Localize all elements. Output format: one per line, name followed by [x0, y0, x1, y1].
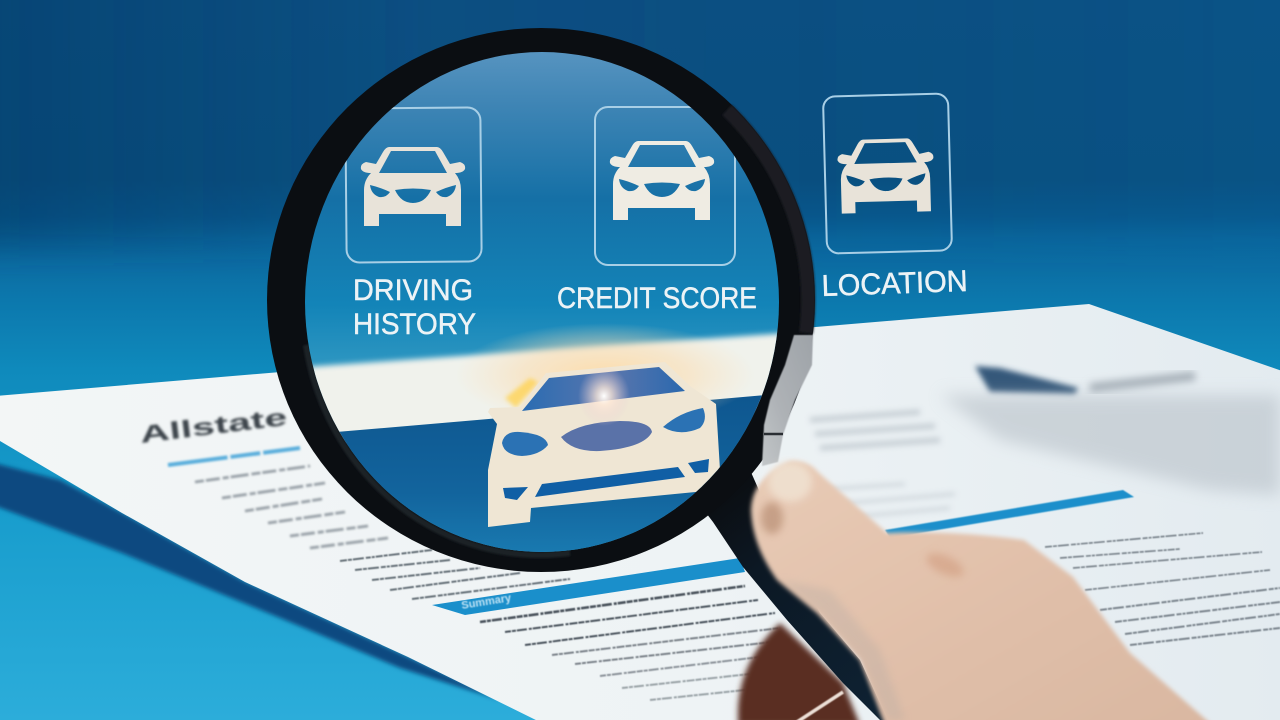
back finger: [738, 623, 860, 720]
car body: [488, 362, 720, 527]
blurred logo top right: [975, 366, 1078, 394]
ring: [267, 28, 815, 572]
icon: car: [361, 147, 465, 226]
thumb shadow: [761, 502, 783, 534]
ring highlight notch: [764, 433, 783, 435]
magnified paper band: [290, 332, 800, 445]
paper drop shadow: [0, 462, 500, 700]
ring inner bevel: [306, 345, 570, 555]
ring highlight: [762, 335, 813, 466]
card: credit score: [595, 107, 735, 265]
label: credit score: CREDIT SCORE: [557, 282, 757, 315]
paper sheet: [0, 304, 1280, 720]
band label: Summary: [461, 592, 513, 612]
document title: Allstate: [138, 404, 289, 449]
icon: car: [610, 141, 714, 220]
blurred grey block top right: [940, 395, 1280, 495]
warm glow: [473, 324, 736, 408]
hand: [751, 461, 1212, 720]
label: driving history: DRIVING: [353, 274, 473, 307]
lens background: [305, 52, 779, 552]
card: driving history: [345, 107, 482, 263]
lens flare: [580, 372, 628, 424]
palm edge shade: [780, 580, 905, 720]
headlights and grille: [502, 408, 705, 456]
thumb and palm: [751, 461, 1212, 720]
lens: [305, 52, 779, 552]
card frame: [595, 107, 735, 265]
magnifying glass: [267, 28, 890, 720]
sharper text lines above band: [340, 550, 570, 599]
knuckle crease: [923, 548, 967, 582]
card: location: [823, 93, 952, 254]
text lines right paragraph: [1045, 533, 1280, 645]
card frame: [345, 107, 482, 263]
blurred text lines upper left: [195, 466, 388, 548]
insurance document: [0, 304, 1280, 720]
strap highlight: [797, 692, 843, 720]
main car: [488, 362, 720, 527]
label: driving history: HISTORY: [353, 308, 476, 341]
thumb nail: [768, 462, 812, 502]
blue summary band: [432, 558, 745, 615]
label: location: LOCATION: [821, 265, 968, 303]
card frame: [823, 93, 952, 254]
yellow glow: [505, 378, 538, 408]
magnified dark table: [340, 395, 762, 552]
lower grille: [503, 459, 709, 500]
icon: car: [837, 138, 935, 214]
blue subheading: [168, 448, 300, 465]
handle: [700, 470, 890, 720]
label: driving history: [355, 279, 476, 334]
windshield: [522, 367, 685, 411]
right blue band: [885, 490, 1134, 538]
blurred heading top right: [1090, 376, 1195, 388]
sharp text lines below band: [480, 586, 790, 700]
ring dark outer bevel: [727, 110, 808, 333]
blurred grey text block middle: [810, 412, 955, 518]
